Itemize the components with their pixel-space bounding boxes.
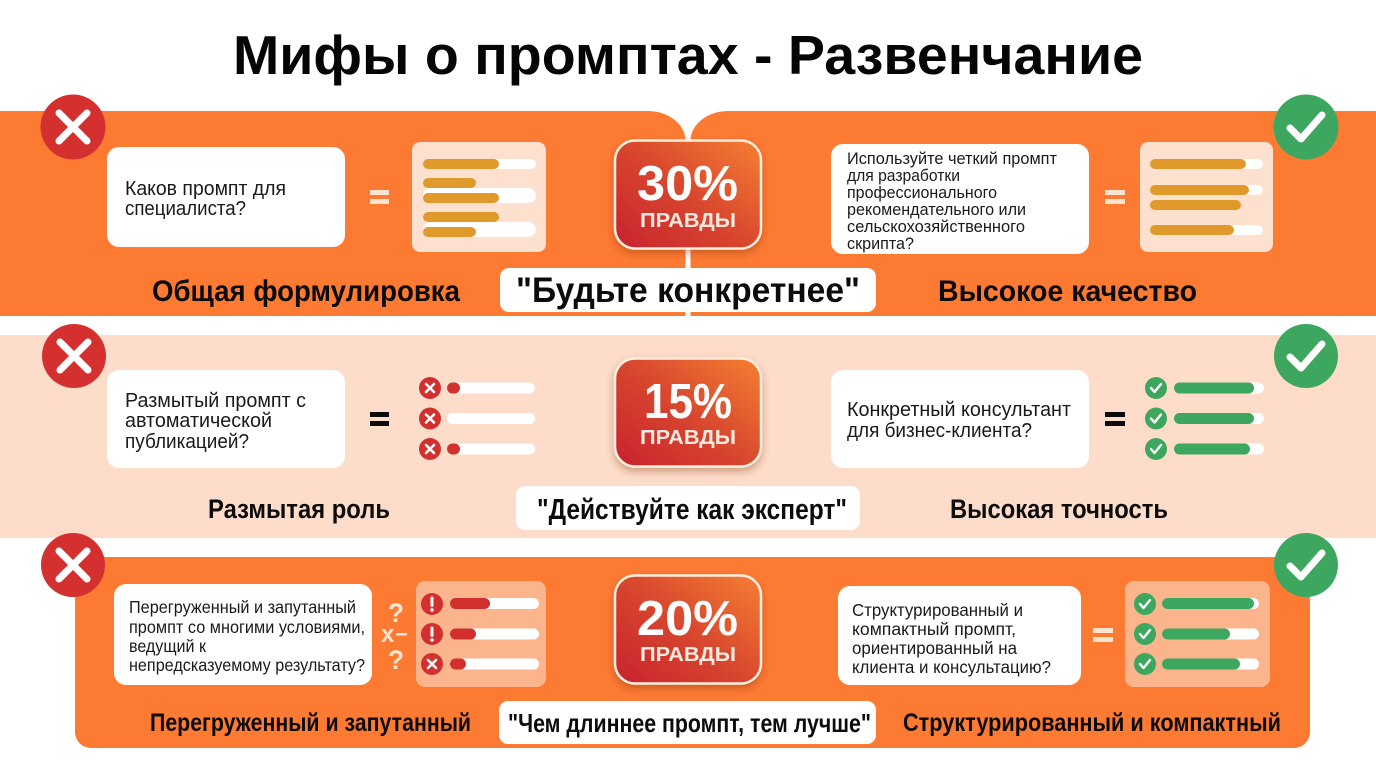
myth quote pill: "Чем длиннее промпт, тем лучше" bbox=[508, 708, 871, 738]
card: good prompt: рекомендательного или bbox=[847, 200, 1026, 219]
label: vague role: Размытая роль bbox=[208, 494, 390, 524]
panel: myth 3 bbox=[75, 557, 1310, 748]
panel background right bbox=[690, 111, 1376, 316]
card: myth prompt: автоматической bbox=[125, 410, 272, 432]
panel background bbox=[0, 335, 1376, 538]
badge: 30% bbox=[615, 140, 761, 248]
badge: 15% bbox=[615, 358, 761, 466]
card: myth prompt: публикацией? bbox=[125, 431, 249, 453]
icon: cross 3 bbox=[41, 533, 105, 597]
label: high quality: Высокое качество bbox=[938, 275, 1197, 308]
panel background left bbox=[0, 111, 686, 316]
card: good prompt: Структурированный и bbox=[852, 600, 1023, 620]
label: high accuracy: Высокая точность bbox=[950, 494, 1168, 524]
card: good prompt: Конкретный консультант bbox=[847, 399, 1071, 421]
badge: 15%: ПРАВДЫ bbox=[640, 427, 736, 449]
badge: 15%: 15% bbox=[644, 375, 732, 429]
card: myth prompt: специалиста? bbox=[125, 198, 246, 220]
equals sign left bbox=[370, 190, 389, 204]
card: myth prompt bbox=[114, 584, 372, 685]
myth quote pill bbox=[499, 701, 876, 744]
equals sign right bbox=[1105, 412, 1125, 426]
card: good prompt bbox=[831, 370, 1089, 468]
confusion symbols: ? bbox=[388, 598, 404, 628]
label: overloaded: Перегруженный и запутанный bbox=[150, 709, 471, 737]
card: good prompt: скрипта? bbox=[847, 234, 914, 253]
card: myth prompt: непредсказуемому результату? bbox=[129, 655, 365, 675]
card: good prompt bbox=[831, 144, 1089, 254]
panel background bbox=[75, 557, 1310, 748]
card: good prompt bbox=[838, 586, 1081, 685]
confusion symbols bbox=[381, 598, 407, 675]
card: myth prompt bbox=[107, 370, 345, 468]
myth quote pill bbox=[516, 486, 860, 530]
card: good prompt: ориентированный на bbox=[852, 638, 1017, 658]
icon: check 1 bbox=[1274, 94, 1338, 160]
badge: 20% bbox=[615, 576, 761, 684]
badge: 30%: 30% bbox=[637, 157, 738, 211]
badge: 30%: ПРАВДЫ bbox=[640, 210, 736, 232]
label: structured: Структурированный и компактный bbox=[903, 709, 1281, 737]
card: good prompt: сельскохозяйственного bbox=[847, 217, 1025, 236]
bars: high accuracy bbox=[1145, 377, 1264, 460]
icon: check 3 bbox=[1274, 533, 1338, 597]
equals sign right bbox=[1093, 628, 1113, 642]
icon: check 2 bbox=[1274, 324, 1338, 388]
equals sign right bbox=[1105, 190, 1125, 204]
panel: myth 2 bbox=[0, 335, 1376, 538]
equals sign left bbox=[370, 412, 389, 426]
label: general wording: Общая формулировка bbox=[152, 275, 460, 308]
myth quote pill: "Действуйте как эксперт" bbox=[537, 494, 847, 526]
bars: structured bbox=[1125, 581, 1270, 687]
icon: cross 1 bbox=[40, 94, 106, 160]
card: good prompt: для бизнес-клиента? bbox=[847, 420, 1032, 442]
badge: 20%: 20% bbox=[637, 592, 738, 646]
icon: cross 2 bbox=[42, 324, 106, 388]
confusion symbols: ? bbox=[388, 645, 404, 675]
card: myth prompt: Размытый промпт с bbox=[125, 390, 306, 412]
bars: overloaded bbox=[416, 581, 546, 687]
card: good prompt: компактный промпт, bbox=[852, 619, 1016, 639]
confusion symbols: x bbox=[381, 621, 395, 648]
card: good prompt: для разработки bbox=[847, 166, 960, 185]
title: Мифы о промптах - Развенчание bbox=[233, 24, 1143, 86]
badge: 20%: ПРАВДЫ bbox=[640, 644, 736, 666]
bars: high quality bbox=[1140, 142, 1273, 252]
myth quote pill: "Будьте конкретнее" bbox=[516, 271, 860, 310]
card: myth prompt: Каков промпт для bbox=[125, 178, 286, 200]
card: good prompt: профессионального bbox=[847, 183, 997, 202]
panel: myth 1 bbox=[0, 111, 1376, 316]
card: myth prompt: промпт со многими условиями, bbox=[129, 617, 365, 637]
connector line bbox=[686, 245, 690, 316]
bars: vague role bbox=[419, 377, 535, 460]
card: myth prompt: ведущий к bbox=[129, 636, 206, 656]
bars: general wording bbox=[412, 142, 546, 252]
card: myth prompt: Перегруженный и запутанный bbox=[129, 597, 356, 617]
card: good prompt: Используйте четкий промпт bbox=[847, 149, 1057, 168]
card: good prompt: клиента и консультацию? bbox=[852, 657, 1051, 677]
card: myth prompt bbox=[107, 147, 345, 247]
